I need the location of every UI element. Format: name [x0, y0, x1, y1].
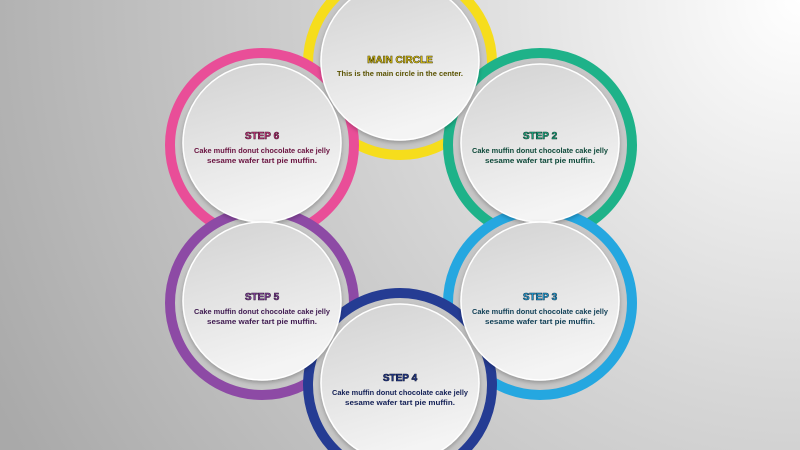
step 3: Cake muffin donut chocolate cake jelly — [472, 307, 609, 316]
step 2: STEP 2 — [523, 131, 558, 142]
main circle: MAIN CIRCLE — [367, 55, 433, 66]
step 4 — [321, 304, 479, 450]
step 2: Cake muffin donut chocolate cake jelly — [472, 146, 609, 155]
step 6: STEP 6 — [245, 131, 280, 142]
step 5 — [183, 222, 341, 380]
main circle — [321, 0, 479, 140]
step 2 — [461, 64, 619, 222]
step 6 — [183, 64, 341, 222]
step 3 — [461, 222, 619, 380]
step 3: STEP 3 — [523, 292, 558, 303]
step 4: Cake muffin donut chocolate cake jelly — [332, 388, 469, 397]
step 5: Cake muffin donut chocolate cake jelly — [194, 307, 331, 316]
main circle: This is the main circle in the center. — [337, 69, 463, 78]
step 4: sesame wafer tart pie muffin. — [345, 398, 455, 407]
step 5: STEP 5 — [245, 292, 280, 303]
step 6: sesame wafer tart pie muffin. — [207, 156, 317, 165]
step 4: STEP 4 — [383, 373, 418, 384]
step 6: Cake muffin donut chocolate cake jelly — [194, 146, 331, 155]
step 5: sesame wafer tart pie muffin. — [207, 317, 317, 326]
step 3: sesame wafer tart pie muffin. — [485, 317, 595, 326]
step 2: sesame wafer tart pie muffin. — [485, 156, 595, 165]
rings — [170, 0, 632, 450]
